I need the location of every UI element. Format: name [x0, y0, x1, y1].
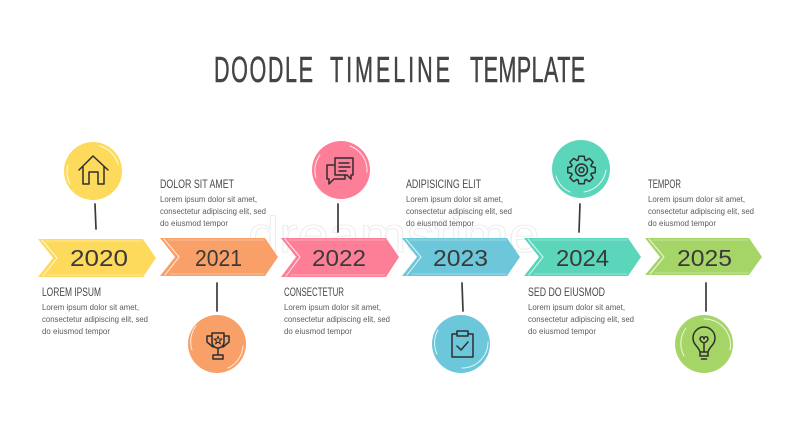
icon: house [79, 156, 108, 184]
year 2021: 2021 [195, 245, 242, 271]
heading 2021: DOLOR SIT AMET [160, 179, 234, 191]
circle 2024 [552, 140, 610, 198]
title [214, 50, 585, 90]
icon: light bulb [693, 327, 715, 359]
circle 2021 [188, 315, 246, 373]
connector 2020 [95, 204, 96, 229]
year 2020: 2020 [70, 245, 128, 271]
text block 2022 [284, 302, 390, 336]
text block 2023 [406, 194, 512, 228]
year 2024: 2024 [556, 245, 609, 271]
milestone 2020 [38, 142, 156, 336]
text block 2021 [160, 194, 266, 228]
milestone 2024 [524, 140, 641, 336]
arrow 2021 [160, 238, 278, 276]
connector 2024 [579, 204, 580, 232]
icon: gear [568, 156, 595, 184]
milestone 2021 [160, 179, 278, 373]
year 2023: 2023 [433, 245, 488, 271]
milestone 2022 [281, 141, 399, 336]
icon: chat bubbles [327, 158, 353, 184]
text block 2025: consectetur adipiscing elit, sed [648, 206, 754, 216]
text block 2022: consectetur adipiscing elit, sed [284, 314, 390, 324]
arrow 2022 [281, 238, 399, 277]
text block 2024: Lorem ipsum dolor sit amet, [528, 302, 625, 312]
arrow 2020 [38, 239, 156, 277]
milestone 2025 [645, 179, 762, 373]
year 2022: 2022 [312, 245, 366, 271]
text block 2024: do eiusmod tempor [528, 326, 596, 336]
circle 2025 [675, 315, 733, 373]
icon: trophy [207, 333, 229, 359]
heading 2020: LOREM IPSUM [42, 287, 101, 299]
text block 2023: consectetur adipiscing elit, sed [406, 206, 512, 216]
circle 2023 [432, 315, 490, 373]
text block 2025: do eiusmod tempor [648, 218, 716, 228]
text block 2025: Lorem ipsum dolor sit amet, [648, 194, 745, 204]
icon: clipboard check [452, 331, 473, 357]
connector 2025 [705, 283, 707, 311]
title: DOODLE [214, 50, 313, 90]
text block 2022: do eiusmod tempor [284, 326, 352, 336]
text block 2021: Lorem ipsum dolor sit amet, [160, 194, 257, 204]
text block 2025 [648, 194, 754, 228]
title: TEMPLATE [470, 50, 585, 90]
text block 2022: Lorem ipsum dolor sit amet, [284, 302, 381, 312]
text block 2023: do eiusmod tempor [406, 218, 474, 228]
heading 2025: TEMPOR [648, 179, 681, 191]
heading 2024: SED DO EIUSMOD [528, 287, 605, 299]
text block 2021: do eiusmod tempor [160, 218, 228, 228]
title: TIMELINE [330, 50, 450, 90]
arrow 2025 [645, 238, 762, 275]
arrow 2023 [402, 238, 520, 276]
connector 2023 [462, 283, 463, 311]
text block 2020: do eiusmod tempor [42, 326, 110, 336]
milestone 2023 [402, 179, 520, 373]
text block 2020 [42, 302, 148, 336]
connector 2022 [337, 204, 339, 232]
heading 2023: ADIPISICING ELIT [406, 179, 481, 191]
circle 2022 [312, 141, 370, 199]
arrow 2024 [524, 238, 641, 276]
text block 2023: Lorem ipsum dolor sit amet, [406, 194, 503, 204]
text block 2020: consectetur adipiscing elit, sed [42, 314, 148, 324]
text block 2024 [528, 302, 634, 336]
heading 2022: CONSECTETUR [284, 287, 344, 299]
text block 2021: consectetur adipiscing elit, sed [160, 206, 266, 216]
circle 2020 [64, 142, 122, 200]
year 2025: 2025 [677, 245, 732, 271]
watermark: dreamstime [248, 207, 540, 263]
text block 2024: consectetur adipiscing elit, sed [528, 314, 634, 324]
connector 2021 [216, 283, 218, 311]
text block 2020: Lorem ipsum dolor sit amet, [42, 302, 139, 312]
